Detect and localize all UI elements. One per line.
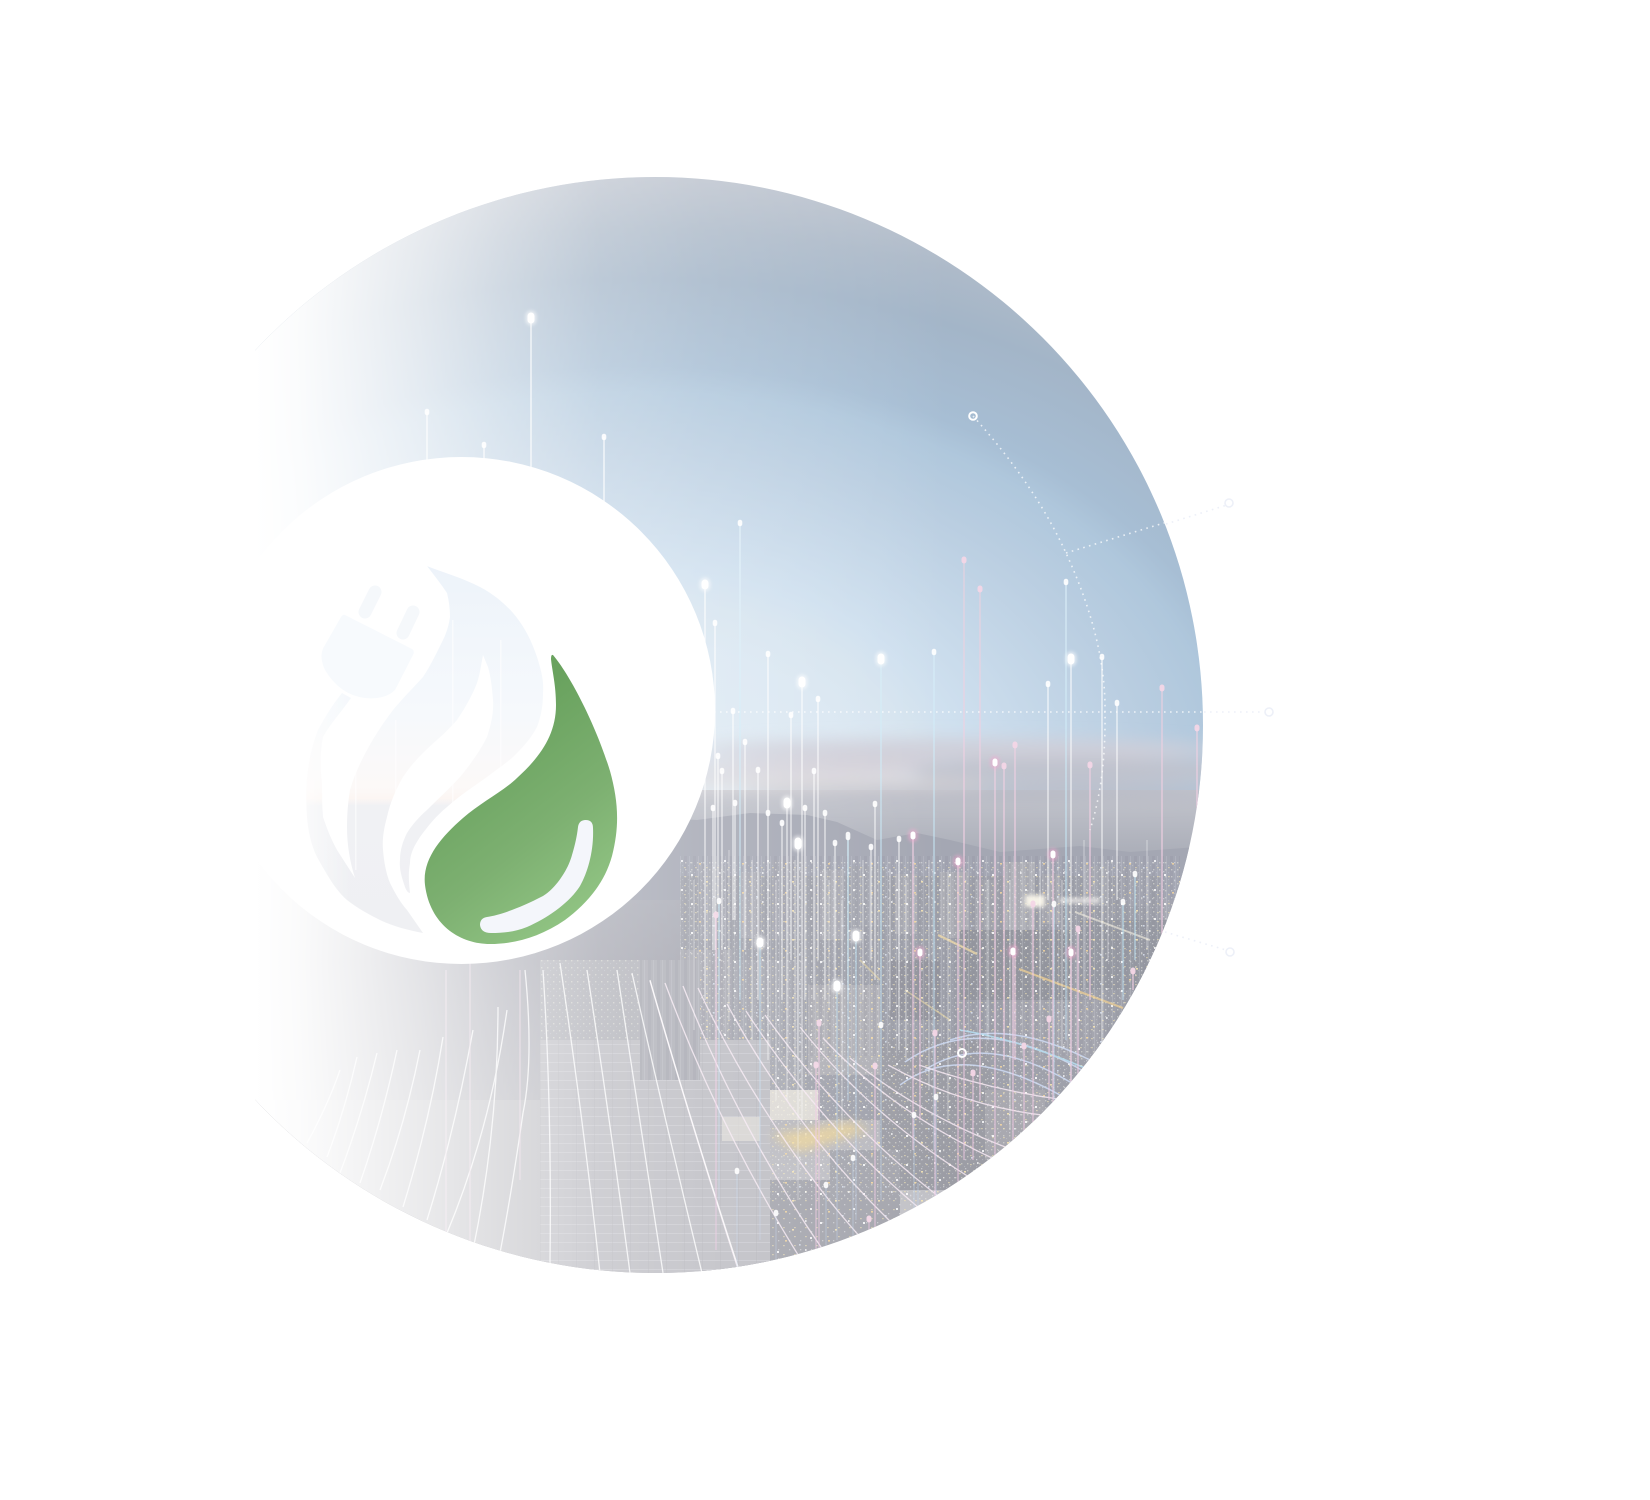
mountains	[676, 813, 1189, 900]
perspective light lines, right fan	[650, 981, 1065, 1269]
white emblem disc	[208, 457, 715, 964]
node rings inside the disc	[958, 412, 977, 1057]
emblem: plug and flame cut-outs	[300, 566, 543, 933]
illustration: circular city photo with energy leaf emblem	[255, 177, 1274, 1273]
vertical data lines: white	[427, 318, 1117, 1200]
faint headless city light lines	[694, 840, 1147, 1130]
icon: green energy leaf drop	[425, 655, 617, 944]
data line heads: pink	[716, 559, 1197, 1220]
lit buildings and streets	[722, 895, 1150, 1152]
sky	[255, 170, 1220, 810]
dotted network lines inside the disc	[720, 416, 1202, 830]
vertical data lines: pink and lilac	[716, 560, 1197, 1270]
data line heads: small white	[427, 411, 1135, 1214]
icon: plug body	[322, 615, 414, 698]
data line heads: soft glow	[531, 316, 1071, 988]
data line heads: bright pink glow	[913, 761, 1071, 954]
window lights	[680, 856, 1180, 1056]
photo disc: city skyline at dusk with data pins	[255, 170, 1269, 1290]
perspective light lines, centre and left fan	[307, 960, 740, 1273]
faint dotted connectors and nodes beyond the disc	[1165, 499, 1273, 956]
glowing blue waves	[900, 1030, 1090, 1095]
data line heads: large white	[531, 316, 1071, 988]
vertical data lines: pale blue	[719, 523, 1135, 1270]
left white fade over the photo	[255, 177, 822, 1273]
data line heads: bright pink core	[913, 761, 1071, 954]
clouds near the horizon	[703, 736, 1202, 790]
foreground tower	[540, 1040, 770, 1280]
icon: leaf highlight	[480, 820, 593, 933]
midground city blocks	[680, 860, 1170, 1280]
ground base	[255, 790, 1220, 1290]
icon: plug prongs	[365, 592, 413, 633]
